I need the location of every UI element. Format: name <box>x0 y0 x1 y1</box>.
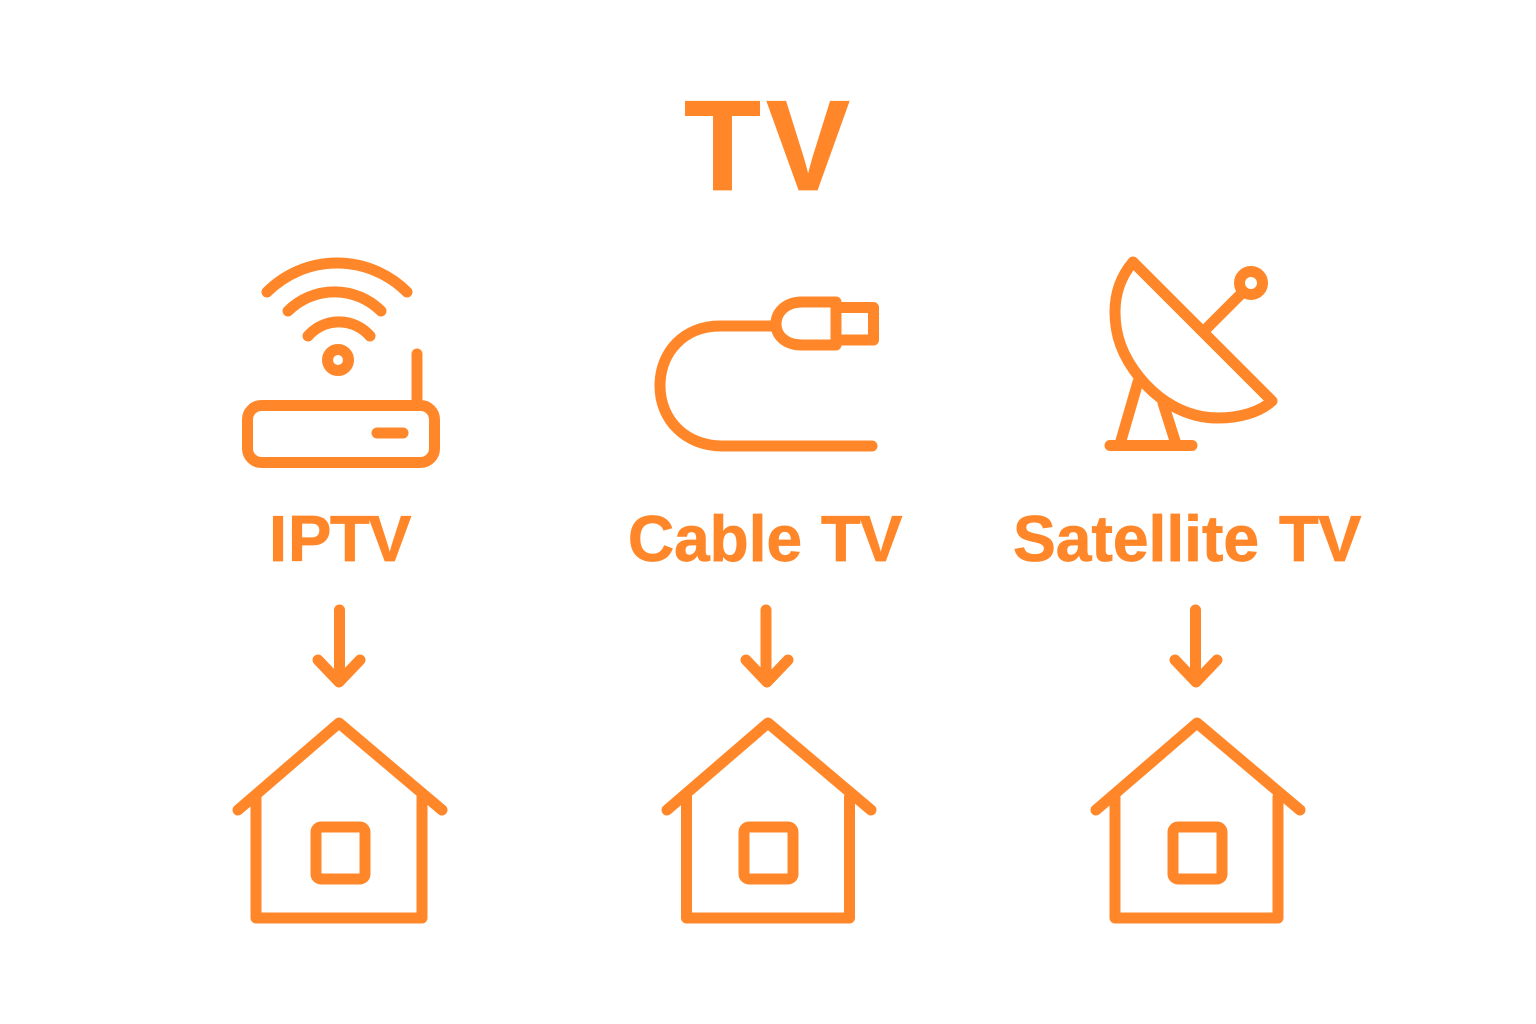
icon: cable plug <box>660 302 874 446</box>
label: Cable TV: Cable <box>628 502 802 575</box>
label: Cable TV: TV <box>821 502 902 575</box>
icon: wifi router <box>248 263 434 462</box>
arrow: IPTV to home <box>318 610 360 682</box>
label: Cable TV <box>628 502 902 575</box>
panel: Satellite TV <box>1013 262 1361 918</box>
label: Satellite TV: TV <box>1279 502 1361 575</box>
title: V <box>766 74 850 218</box>
icon: home <box>238 723 442 918</box>
arrow: Cable TV to home <box>746 610 788 682</box>
arrow: Satellite TV to home <box>1175 610 1217 682</box>
icon: satellite dish <box>1110 262 1272 446</box>
panel: Cable TV <box>628 302 902 918</box>
label: IPTV: IPTV <box>269 502 411 575</box>
panel: IPTV <box>238 263 442 918</box>
icon: home <box>1096 723 1300 918</box>
title <box>684 74 850 218</box>
title: T <box>684 74 761 218</box>
label: Satellite TV: Satellite <box>1013 502 1259 575</box>
icon: home <box>667 723 871 918</box>
